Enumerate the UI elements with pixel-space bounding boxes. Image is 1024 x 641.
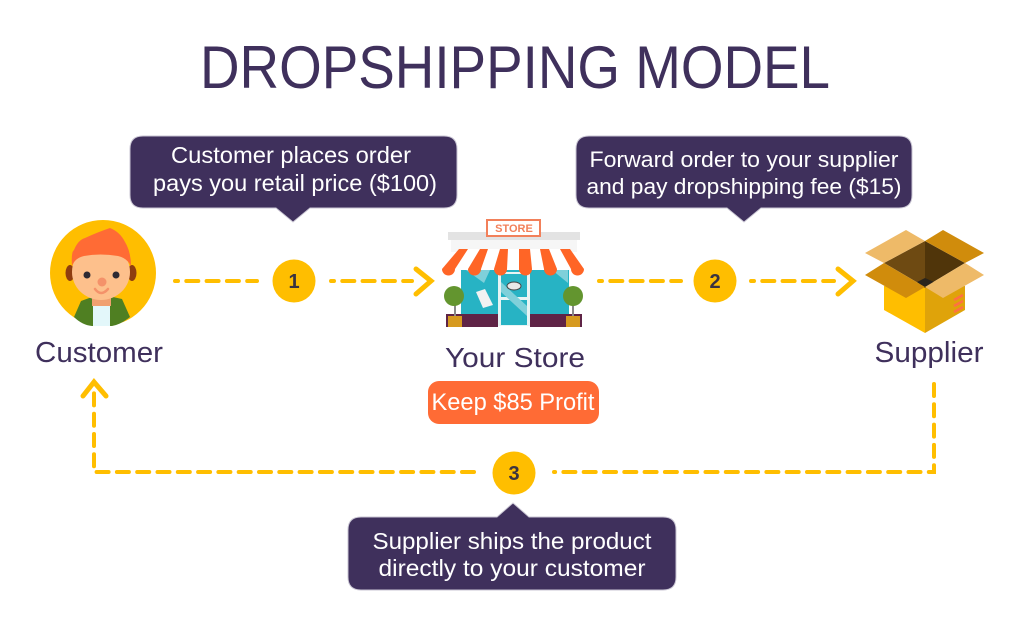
step 3 badge: 3 — [508, 463, 520, 485]
callout: forward order: and pay dropshipping fee ($15) — [586, 174, 902, 199]
arrow: supplier to customer — [83, 382, 934, 472]
callout: supplier ships: Supplier ships the product — [372, 528, 652, 554]
arrow: customer to store — [175, 269, 431, 294]
callout: customer places order: Customer places order — [171, 142, 411, 168]
callout: supplier ships: directly to your customer — [378, 555, 646, 581]
callout: supplier ships — [348, 503, 676, 590]
badge: keep $85 profit: Keep $85 Profit — [432, 389, 595, 416]
step 3 badge — [492, 452, 536, 494]
icon: supplier box — [865, 230, 984, 333]
icon: customer — [50, 220, 156, 326]
callout: forward order: Forward order to your supplier — [590, 147, 898, 172]
step 1 badge: 1 — [288, 271, 300, 293]
title: DROPSHIPPING MODEL — [200, 34, 830, 101]
icon: store: STORE — [495, 223, 533, 235]
step 2 badge: 2 — [709, 271, 721, 293]
arrow: store to supplier — [599, 269, 853, 294]
step 2 badge — [694, 260, 736, 302]
label: your store: Your Store — [445, 342, 585, 373]
callout: customer places order: pays you retail price ($100) — [153, 170, 437, 196]
icon: store — [442, 220, 584, 327]
badge: keep $85 profit — [428, 381, 599, 424]
label: customer: Customer — [35, 337, 163, 369]
step 1 badge — [272, 260, 316, 302]
callout: customer places order — [130, 136, 457, 222]
callout: forward order — [576, 136, 912, 222]
label: supplier: Supplier — [874, 337, 984, 369]
